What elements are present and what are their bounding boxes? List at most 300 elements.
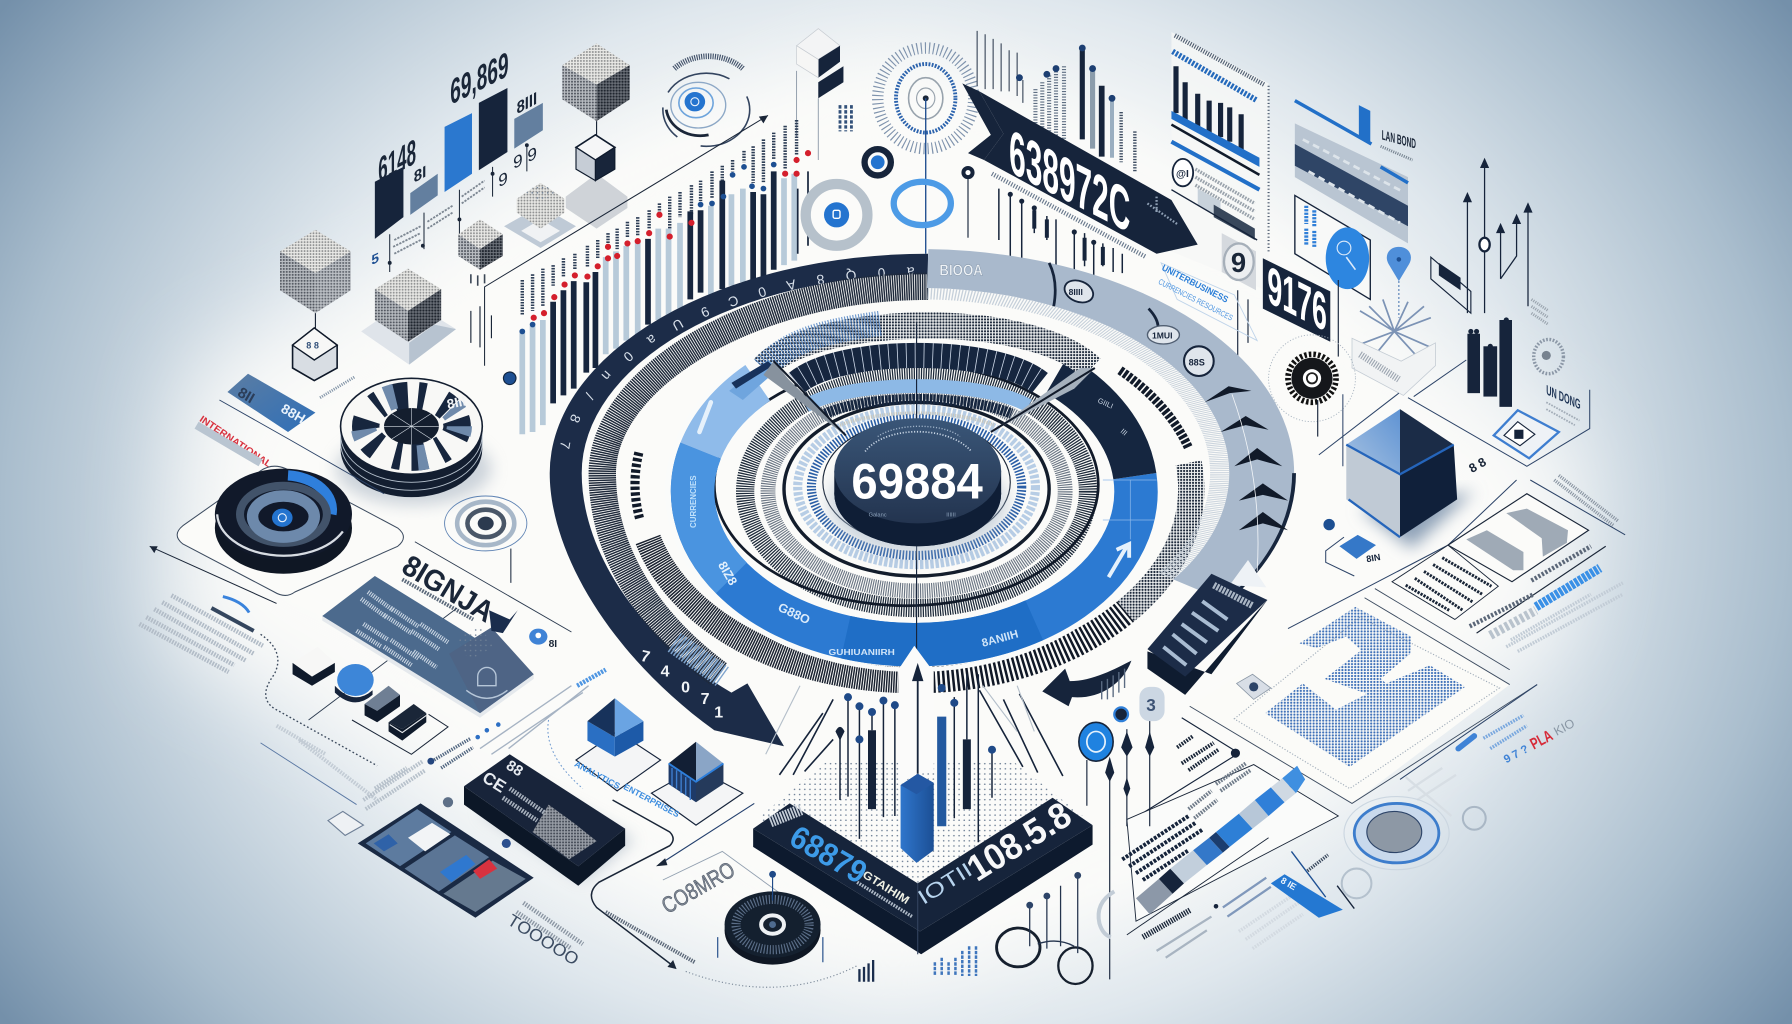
thick navy bars [872, 730, 967, 809]
tower two [1483, 346, 1497, 397]
blue heading [1536, 568, 1600, 607]
underline [1477, 546, 1606, 633]
blue ring labels: CURRENCIES [688, 475, 698, 528]
label: 8IN [1365, 552, 1381, 564]
centre vertical line [916, 323, 918, 800]
disc micro text: Galanc [869, 513, 887, 519]
blue oval block [337, 664, 374, 696]
core [478, 517, 494, 530]
disc bottom curve [834, 441, 1001, 546]
crescent [1099, 891, 1114, 937]
tile [1222, 233, 1256, 290]
background white diamond glow [171, 57, 1577, 983]
blue oval side [335, 686, 373, 702]
navy bar two [1099, 86, 1104, 157]
disc top [834, 418, 1001, 523]
card side [322, 616, 534, 718]
top face [280, 230, 351, 273]
band dividers [1049, 263, 1158, 341]
gray wedges [363, 394, 459, 458]
burst rays [1358, 299, 1431, 357]
navy ring [1114, 707, 1128, 721]
pins under banner [992, 174, 1146, 280]
blue hatch [935, 946, 976, 976]
pin thick parts [1034, 210, 1103, 265]
disk base [215, 482, 352, 574]
top centre bar chart of pins [977, 31, 1135, 171]
value left: 68879 [784, 818, 873, 891]
gray rows [1157, 917, 1211, 958]
faded shape [1406, 768, 1456, 816]
text: blue caption rows [548, 720, 681, 819]
card: blue label tile [219, 374, 384, 494]
banner body [979, 91, 1198, 254]
text block: blue tag rows [1157, 263, 1257, 341]
hash tile [840, 105, 851, 131]
gray tile [1198, 189, 1221, 217]
plate [361, 299, 456, 365]
banner small text [1147, 197, 1177, 224]
stack layer bottom [341, 401, 482, 497]
white block top [293, 328, 337, 360]
text: LAN BOND [1382, 127, 1416, 152]
stipple diamond [758, 760, 1086, 891]
dotted top rows [1175, 35, 1264, 85]
navy dot [427, 758, 434, 765]
block one top [293, 647, 335, 677]
blue ring dark bottom [846, 620, 1034, 645]
text rows [357, 592, 448, 667]
stippled right face [597, 65, 630, 121]
diagonal axis with arrow [485, 115, 768, 366]
text faint lower left [261, 726, 425, 835]
arrow heads [1463, 158, 1533, 233]
stripe blue four [1282, 766, 1305, 793]
label bottom: GUHIUANIIRH [829, 647, 895, 657]
gray outer ring [928, 269, 1294, 602]
label navy two: III [1119, 427, 1129, 438]
gray blocks [1239, 891, 1303, 949]
blue blob [1326, 227, 1369, 289]
check arrow [489, 610, 518, 633]
dot center [535, 633, 541, 638]
lower right face [1400, 445, 1457, 537]
small hatch bars bottom [859, 946, 976, 982]
block one body [293, 663, 335, 686]
frame [1448, 494, 1589, 582]
pill text: 8IIII [1069, 287, 1083, 297]
navy wedges [366, 395, 457, 457]
dark band slits [797, 355, 1040, 383]
dotted halo [1269, 335, 1355, 422]
tile three [443, 861, 526, 912]
chevron line [1232, 394, 1258, 571]
pill label one [1061, 276, 1096, 307]
white block [293, 328, 337, 381]
swirl ring [1224, 243, 1254, 280]
connector stems [390, 146, 527, 272]
banner: chevron arrow 638972C: 638972C [1009, 116, 1130, 246]
stem [510, 549, 512, 583]
dot [1214, 904, 1218, 909]
tower caps [1471, 320, 1506, 346]
outline [1133, 718, 1239, 819]
gauge hatch arc [674, 56, 743, 69]
tag text: 8 IE [1279, 875, 1298, 892]
navy outer edge [1225, 473, 1294, 602]
lock icon [466, 667, 507, 698]
faint rows [277, 726, 377, 800]
blue ring left lighter [693, 451, 731, 578]
gauge outer [663, 73, 750, 146]
labels on navy segment: GIILI [1096, 396, 1115, 411]
gray label: KIO [1551, 716, 1577, 739]
pedestal plate [566, 174, 627, 229]
lower hatch ring left [648, 539, 921, 680]
spire line [917, 674, 919, 774]
icon: small spiral [445, 496, 527, 583]
gear body [1291, 358, 1333, 399]
top right face [615, 698, 643, 737]
small cube left [576, 147, 595, 181]
stipple big glyph [1265, 607, 1465, 767]
blue top line [1295, 101, 1371, 144]
vertical pins and blue badge [1079, 687, 1165, 979]
left black dashes [635, 453, 640, 520]
pill label three [1184, 346, 1214, 376]
digit 7: 7 [639, 648, 652, 666]
black ring [997, 928, 1040, 967]
pin stems [1030, 877, 1078, 953]
upper right black hatch [1120, 370, 1189, 448]
value label 69,869: 69,869 [450, 43, 509, 113]
stipple columns [1035, 66, 1064, 144]
gray ring [1058, 947, 1093, 984]
note frame [1392, 545, 1498, 619]
frame [358, 803, 534, 918]
white band glyphs upper: a0Q8A0C9Ua0n/87 [560, 267, 914, 449]
gray tag bar [410, 174, 438, 215]
navy hatched block [1147, 574, 1267, 695]
drop stems [797, 71, 818, 160]
equalizer slider chart [471, 115, 808, 434]
arrow line left [150, 546, 277, 603]
light rays [766, 686, 1034, 754]
heading glyphs: CE [479, 767, 510, 797]
isometric small blocks row [293, 647, 448, 754]
lower left face [1346, 445, 1400, 537]
disk top [215, 469, 352, 560]
pin heads [1010, 194, 1094, 242]
blue tab [1359, 105, 1370, 145]
rows [1406, 558, 1491, 610]
cube: navy on plate [651, 742, 743, 825]
dots [478, 725, 498, 737]
top dots [1019, 48, 1112, 98]
blue grid ticks [1103, 480, 1157, 539]
navy and blue dots [522, 165, 774, 331]
drop line [1337, 280, 1339, 357]
panel: diamond frame lines right [1288, 360, 1625, 629]
text: serif rows bottom [504, 903, 583, 969]
blue header rows [1173, 51, 1257, 101]
thin line [261, 743, 357, 805]
rings and dots cluster [806, 149, 973, 246]
text block: gray rows left [139, 595, 377, 766]
icon tile [328, 811, 363, 835]
red text: INTERNATIONAL [197, 414, 274, 470]
cube: middle stippled on plate [361, 269, 456, 365]
swirl center [1542, 351, 1551, 360]
stack layer two [341, 386, 482, 482]
tile mark: 8II [235, 385, 257, 407]
halo [1344, 797, 1449, 870]
stems [1087, 717, 1150, 826]
navy tall bar right [798, 171, 808, 254]
small label left: GTAIHIM [860, 869, 911, 907]
tile glyph: 3 [1146, 695, 1156, 715]
right face [480, 234, 503, 270]
text rows [1122, 816, 1202, 880]
rows [503, 789, 546, 821]
dark ring [467, 510, 504, 537]
pin bottom [1337, 886, 1354, 909]
circle two [502, 839, 511, 848]
thin lines [977, 31, 1023, 103]
disc side [834, 471, 1001, 546]
tent chevrons [1205, 386, 1288, 530]
disc dotted arc two [878, 426, 960, 437]
icon mark [1514, 430, 1523, 439]
tower top [901, 774, 934, 794]
top [464, 754, 625, 866]
hatch end light blue [674, 642, 722, 677]
top rows [517, 903, 583, 949]
frame [1161, 263, 1257, 341]
right lower face [615, 721, 643, 757]
panel: tile with two gray bands [1448, 494, 1589, 582]
core mark [833, 210, 840, 218]
texture [1303, 139, 1403, 223]
white spire [898, 646, 934, 784]
text note black rows [1392, 545, 1498, 619]
platform icon tile [1504, 422, 1535, 446]
left face [375, 289, 408, 342]
frame line [1127, 838, 1269, 935]
tile center [1249, 682, 1258, 691]
label: red text [197, 414, 274, 470]
frame [1127, 765, 1338, 921]
gray band one [1466, 530, 1523, 570]
digit 7 two: 7 [701, 691, 710, 708]
digit 1: 1 [714, 705, 723, 722]
shadow [480, 789, 634, 880]
stippled left face [562, 65, 597, 121]
gauge mid rings [671, 82, 726, 128]
blue accent [223, 597, 249, 613]
cube: left stippled with white block [280, 230, 351, 381]
gray ring [240, 486, 327, 543]
gauge blue core [685, 92, 705, 111]
swoosh arrow [1042, 661, 1131, 706]
pin top [1291, 851, 1326, 897]
right face [315, 251, 351, 313]
stem [596, 121, 598, 137]
blue mini glyph: 9 7 ? [1502, 743, 1531, 766]
outer hatch ring [602, 286, 928, 674]
navy target ring [865, 149, 891, 175]
card: navy text block [464, 754, 634, 886]
stem heads [848, 688, 992, 750]
circle one [443, 797, 453, 807]
gray ring heading: BIOOA [939, 262, 983, 279]
rows [1177, 736, 1218, 770]
label lower left: 8IZ8 [715, 559, 740, 588]
pointer right edge [991, 368, 1095, 432]
dotted text [320, 377, 354, 398]
core ring [278, 514, 286, 522]
stripe gray start [1136, 879, 1173, 914]
small white cube top [576, 135, 615, 160]
pill [1147, 326, 1179, 344]
small text tile right [1466, 455, 1618, 526]
centre value: 69884 [851, 452, 983, 509]
pin hole [1397, 257, 1401, 262]
right stipple band [1126, 463, 1191, 611]
thick navy bar [1080, 48, 1085, 139]
target blue center [871, 155, 885, 169]
top stipple arc [763, 326, 1091, 368]
navy ring segment [1057, 374, 1135, 476]
frame with navy tile [1431, 257, 1471, 313]
blue core [272, 509, 293, 527]
arrow on blue ring left [699, 402, 711, 432]
spire arrow [912, 663, 923, 681]
blob face glyph [1337, 241, 1351, 255]
small fork glyph [471, 306, 491, 347]
heading: large garbled label: 8IGNJA [396, 549, 500, 629]
panel: isometric bar labels top left [371, 43, 543, 272]
icon: blue pin and burst [1352, 247, 1435, 395]
navy bars [553, 171, 774, 403]
shadow [1360, 491, 1474, 549]
block four top [389, 704, 426, 729]
hatch tiles [1189, 763, 1250, 818]
dashed link [1398, 281, 1400, 318]
black line [1171, 125, 1259, 175]
tile blue code: 88H [278, 401, 308, 427]
dot badge [1323, 519, 1335, 530]
stripe blue two [1216, 814, 1253, 847]
gray bar [1090, 71, 1095, 149]
inner stipple ring [768, 392, 1065, 591]
heading glyphs 2: 88 [503, 758, 526, 780]
outline [1326, 525, 1354, 576]
caption: ANALYTICS [573, 759, 622, 791]
pill [1184, 346, 1214, 376]
core dot [923, 95, 929, 101]
teeth [1288, 354, 1336, 402]
base plate [504, 206, 576, 248]
bars [859, 960, 873, 982]
navy slanted tab left [729, 360, 779, 400]
glyph row: CO8MRO [657, 856, 739, 919]
badge ring [1087, 731, 1105, 752]
stripe light two [1239, 800, 1269, 829]
top stipple left blue tint [763, 323, 880, 368]
disc micro text right: IIIIII [946, 513, 956, 519]
thin inner ring [823, 421, 1010, 544]
block text [1214, 585, 1253, 606]
white under blue band [667, 313, 1161, 670]
stripe navy [1159, 869, 1184, 894]
hatch rows [1554, 475, 1618, 526]
pointer left edge [774, 361, 846, 435]
mini text [432, 738, 473, 768]
stripe light [1170, 850, 1207, 883]
gauge navy arc [666, 110, 709, 136]
white top [797, 29, 840, 59]
black thin outer ring [714, 363, 1098, 606]
light ring [798, 409, 1035, 565]
icon: blue square tile with label [1323, 519, 1381, 576]
thin stems [840, 674, 992, 842]
rounded frame [177, 466, 403, 595]
panel: striped spectrum chart [1122, 763, 1338, 921]
route [591, 800, 674, 967]
blue badge [1079, 722, 1113, 761]
rounded route line with arrows [591, 800, 754, 969]
card face [322, 576, 534, 713]
pale inner arc [840, 413, 994, 425]
navy band [1295, 144, 1408, 226]
tile one [366, 809, 451, 866]
gray text rows [1195, 169, 1255, 219]
rows top [1307, 855, 1328, 871]
ring pins bottom [997, 875, 1114, 984]
panel: circular dial with glyphs [606, 851, 857, 987]
navy outer band with arrow [550, 254, 928, 746]
outer ring [457, 502, 514, 545]
stripe blue three [1255, 787, 1285, 816]
dial white ring [761, 915, 784, 934]
blob mark [1346, 257, 1355, 270]
dotted route [261, 634, 377, 766]
left face [669, 763, 696, 802]
blue gray bar [1110, 101, 1114, 158]
circle badge [1173, 159, 1193, 186]
stippled top face [562, 43, 630, 85]
small ring two [1342, 869, 1371, 898]
block [1263, 258, 1330, 342]
gray tag bar three [514, 103, 543, 149]
cube: large blue navy [1346, 409, 1474, 549]
left side [797, 46, 818, 78]
plinth seam [917, 883, 919, 954]
left lower face [587, 721, 615, 757]
faint label [363, 761, 425, 809]
digits on arrow [639, 648, 723, 722]
top dark band [797, 355, 1040, 383]
glyph row: 9 9 [513, 143, 537, 173]
thin halo [445, 496, 527, 551]
block four stripe [390, 715, 426, 733]
pin marker [503, 372, 516, 385]
text with blue and red tags far right [1406, 715, 1577, 816]
frame lines [1190, 589, 1537, 803]
stack layer mid [341, 394, 482, 490]
ribbed band [928, 294, 1220, 576]
